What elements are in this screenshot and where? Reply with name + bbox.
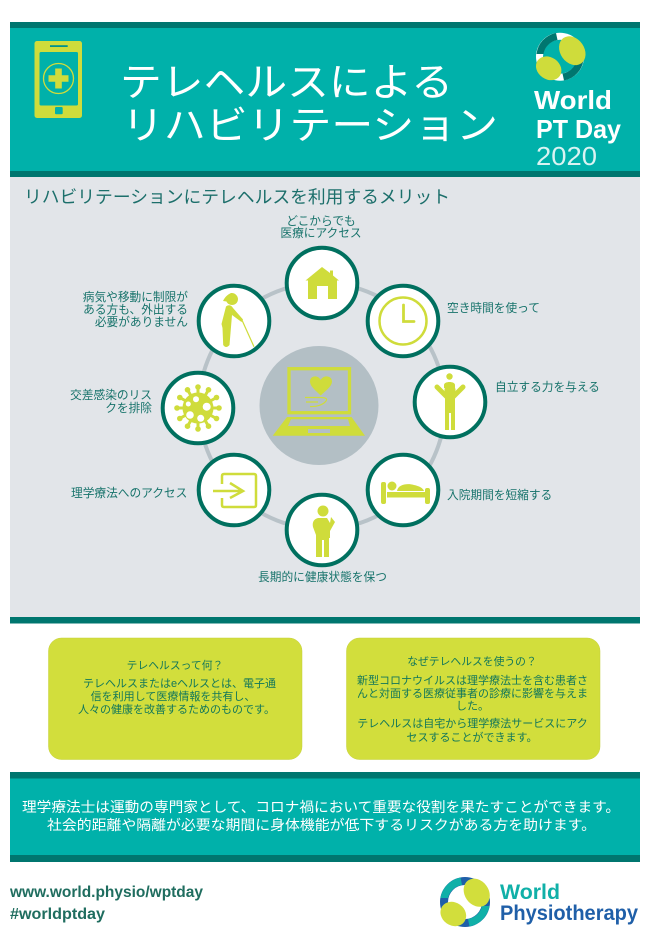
item: access from anywhere [287, 248, 357, 318]
callout: what is telehealth: 人々の健康を改善するためのものです。 [78, 702, 275, 716]
title [120, 62, 498, 148]
footer links: #worldptday [10, 906, 105, 923]
callout: why use telehealth: セスすることができます。 [407, 730, 537, 744]
item: access to physiotherapy [199, 455, 269, 525]
label: eliminate cross infection: 交差感染のリス [70, 388, 152, 402]
item: empowerment [415, 367, 485, 437]
icon: person in bed [381, 482, 430, 504]
item: free time [368, 286, 438, 356]
item: eliminate cross infection [163, 373, 233, 443]
heading: benefits: リハビリテーションにテレヘルスを利用するメリット [24, 187, 450, 207]
callout: what is telehealth: テレヘルスって何？ [127, 659, 223, 672]
label: free time: 空き時間を使って [447, 301, 540, 315]
icon: virus [174, 384, 222, 432]
icon: thinking person [313, 506, 335, 557]
icon: clock [380, 298, 426, 344]
label: no need to go out: 必要がありません [95, 315, 188, 329]
label: no need to go out: ある方も、外出する [83, 302, 188, 316]
banner: physiotherapists message: 理学療法士は運動の専門家として、コロナ禍において重要な役割を果たすことができます。 [22, 799, 620, 816]
label: eliminate cross infection: クを排除 [105, 401, 152, 415]
header banner [10, 22, 640, 177]
label: long-term health: 長期的に健康状態を保つ [258, 570, 387, 584]
banner: physiotherapists message: 社会的距離や隔離が必要な期間に身体機能が低下するリスクがある方を助けます。 [47, 817, 596, 834]
label: access from anywhere [280, 215, 362, 240]
label: empowerment: 自立する力を与える [495, 380, 600, 394]
callout: why use telehealth: テレヘルスは自宅から理学療法サービスにアク [357, 716, 588, 730]
label: shorter hospital stay: 入院期間を短縮する [447, 488, 552, 502]
title: テレヘルスによる [120, 62, 453, 105]
item: no need to go out [199, 286, 269, 356]
panel: benefits [10, 177, 640, 624]
callout: why use telehealth [346, 638, 600, 760]
logo: World PT Day 2020: World [534, 85, 612, 115]
logo: World PT Day 2020: PT Day [536, 114, 622, 144]
label: no need to go out: 病気や移動に制限が [83, 290, 188, 304]
centre circle with laptop icon [260, 346, 378, 465]
callout: why use telehealth: 新型コロナウイルスは理学療法士を含む患者さ [357, 673, 588, 687]
callout: why use telehealth: した。 [456, 700, 489, 712]
logo: World PT Day 2020: 2020 [536, 141, 597, 171]
callout: what is telehealth [48, 638, 302, 760]
icon: phone with medical cross [34, 41, 82, 118]
item: long-term health [287, 495, 357, 565]
footer links: www.world.physio/wptday [9, 884, 203, 901]
label: access to physiotherapy: 理学療法へのアクセス [71, 486, 187, 500]
callout: what is telehealth: テレヘルスまたはeヘルスとは、電子通 [83, 677, 276, 690]
logo: World Physiotherapy [436, 874, 638, 931]
icon: person with cane [222, 293, 254, 347]
icon: adult lifting child [437, 373, 463, 430]
label: eliminate cross infection [70, 388, 152, 415]
label: access from anywhere: どこからでも [286, 215, 356, 228]
banner: physiotherapists message [10, 772, 640, 862]
title: リハビリテーション [122, 105, 498, 148]
ring connecting icons [199, 283, 445, 529]
item: shorter hospital stay [368, 455, 438, 525]
icon: enter arrow [213, 474, 256, 507]
footer links [9, 884, 203, 923]
callout: why use telehealth: んと対面する医療従事者の診療に影響を与えま [357, 686, 588, 700]
icon: house [306, 267, 339, 299]
label: access from anywhere: 医療にアクセス [280, 226, 362, 240]
logo: World PT Day 2020 [531, 31, 622, 171]
callout: why use telehealth: なぜテレヘルスを使うの？ [407, 655, 537, 668]
callout: what is telehealth: 信を利用して医療情報を共有し、 [91, 689, 255, 703]
logo: World Physiotherapy: World [500, 881, 560, 904]
label: no need to go out [83, 290, 188, 329]
logo: World Physiotherapy: Physiotherapy [500, 902, 638, 925]
